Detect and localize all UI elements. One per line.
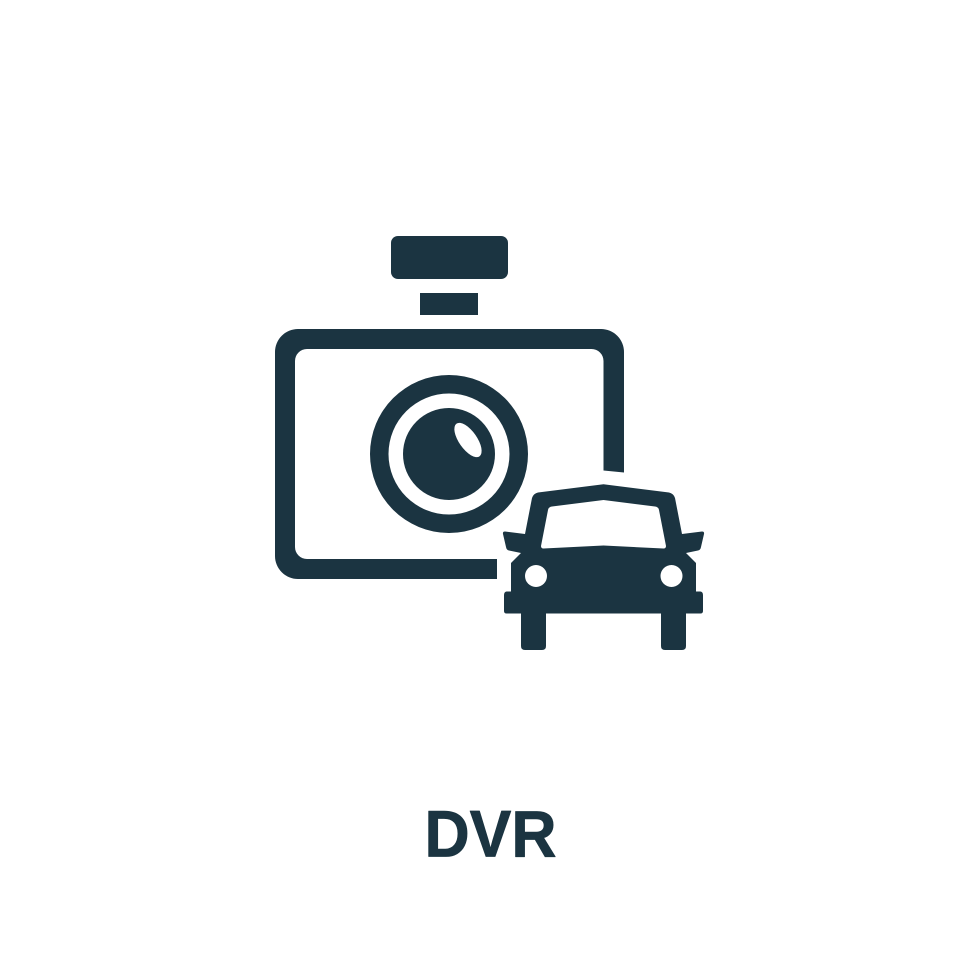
title: DVR: DVR: [424, 796, 556, 870]
windshield: [541, 500, 666, 548]
car front view: [503, 484, 704, 650]
icon: dash camera with car: [275, 236, 704, 650]
lens highlight: [449, 418, 487, 462]
camera body frame: [275, 329, 624, 579]
camera mount top bar: [391, 236, 508, 279]
car body: [503, 484, 704, 650]
right headlight: [660, 565, 682, 587]
lens outer ring: [370, 375, 528, 533]
camera mount neck: [420, 293, 478, 315]
camera lens: [370, 375, 528, 533]
lens glass: [403, 408, 495, 500]
left headlight: [525, 565, 547, 587]
